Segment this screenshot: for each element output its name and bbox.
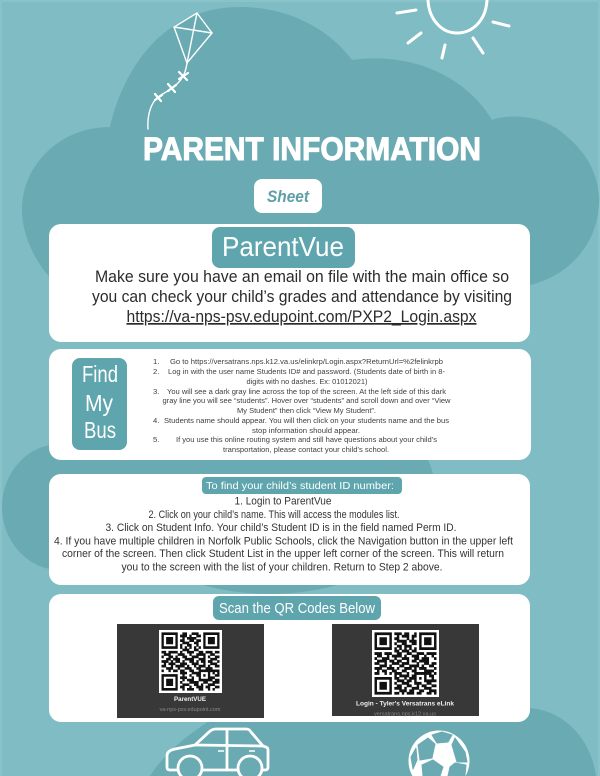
text block: bus steps: Students name should appear. You will then click on your students name and the bus bbox=[164, 416, 449, 425]
text block: bus steps: Log in with the user name Students ID# and password. (Students date of birth in 8- bbox=[168, 367, 445, 376]
text block: email instructions: you can check your child’s grades and attendance by visiting bbox=[92, 287, 512, 306]
text block: bus steps: stop information should appear. bbox=[252, 426, 360, 435]
text block: bus steps: 4. bbox=[153, 416, 159, 425]
text block: email instructions: Make sure you have an email on file with the main office so bbox=[95, 267, 509, 286]
heading: Find My Bus: Bus bbox=[84, 417, 116, 443]
icon: sun bbox=[397, 0, 509, 58]
heading: scan QR bbox=[213, 596, 381, 620]
icon: kite bbox=[148, 13, 212, 129]
text block: ID steps: 3. Click on Student Info. Your child’s Student ID is in the field named Perm ID. bbox=[106, 522, 456, 534]
subtitle badge: Sheet bbox=[254, 179, 322, 213]
title: PARENT INFORMATION bbox=[143, 131, 481, 167]
text block: bus steps: transportation, please contact your child’s school. bbox=[223, 445, 389, 454]
QR card: Versatrans: versatrans.nps.k12.va.us bbox=[374, 712, 437, 718]
text block: bus steps: gray line you will see “students”. Hover over “students” and scroll down and over “View bbox=[162, 396, 451, 405]
heading: scan QR: Scan the QR Codes Below bbox=[219, 600, 375, 617]
heading: student ID bbox=[202, 477, 402, 494]
icon: car bbox=[167, 729, 268, 776]
text block: ID steps: 2. Click on your child’s name. This will access the modules list. bbox=[148, 509, 400, 521]
QR card: ParentVUE bbox=[117, 624, 264, 718]
text block: bus steps: 2. bbox=[153, 367, 159, 376]
panel: student ID bbox=[49, 474, 530, 585]
text block: ID steps: you to the screen with the list of your children. Return to Step 2 above. bbox=[122, 562, 442, 574]
text block: bus steps: If you use this online routing system and still have questions about your child’s bbox=[176, 435, 437, 444]
panel: QR codes bbox=[49, 594, 530, 722]
heading: Find My Bus bbox=[72, 358, 127, 450]
QR card: Versatrans: Login - Tyler's Versatrans eLink bbox=[356, 700, 455, 708]
text block: bus steps: digits with no dashes. Ex: 01012021) bbox=[246, 377, 368, 386]
text block: bus steps: 1. bbox=[153, 357, 159, 366]
text block: bus steps: My Student” then click “View My Student”. bbox=[237, 406, 376, 415]
text block: email instructions: https://va-nps-psv.edupoint.com/PXP2_Login.aspx bbox=[126, 307, 477, 326]
text block: bus steps: Go to https://versatrans.nps.k12.va.us/elinkrp/Login.aspx?ReturnUrl=%2felinkrpb bbox=[170, 357, 443, 366]
QR card: ParentVUE: ParentVUE bbox=[174, 697, 206, 703]
heading: Find My Bus: My bbox=[85, 390, 113, 416]
text block: bus steps bbox=[153, 357, 451, 454]
subtitle badge: Sheet: Sheet bbox=[267, 187, 310, 206]
panel: ParentVue bbox=[49, 224, 530, 342]
text block: bus steps: You will see a dark gray line across the top of the screen. At the left side of this dark bbox=[167, 387, 446, 396]
QR card: ParentVUE: va-nps-psv.edupoint.com bbox=[160, 707, 220, 713]
QR card: Versatrans bbox=[332, 624, 479, 718]
text block: email instructions bbox=[92, 267, 512, 326]
text block: ID steps: 1. Login to ParentVue bbox=[234, 496, 332, 508]
panel: Find My Bus bbox=[49, 349, 531, 460]
text block: ID steps: corner of the screen. Then click Student List in the upper left corner of the screen. This will return bbox=[62, 548, 504, 560]
text block: bus steps: 3. bbox=[153, 387, 159, 396]
heading: ParentVue: ParentVue bbox=[222, 231, 344, 262]
heading: student ID: To find your child’s student ID number: bbox=[206, 480, 394, 492]
text block: ID steps: 4. If you have multiple children in Norfolk Public Schools, click the Navigation button in the upper left bbox=[54, 536, 513, 548]
heading: Find My Bus: Find bbox=[82, 361, 118, 387]
heading: ParentVue bbox=[212, 227, 355, 268]
text block: ID steps bbox=[54, 496, 513, 574]
icon: soccer ball bbox=[408, 730, 470, 776]
text block: bus steps: 5. bbox=[153, 435, 159, 444]
